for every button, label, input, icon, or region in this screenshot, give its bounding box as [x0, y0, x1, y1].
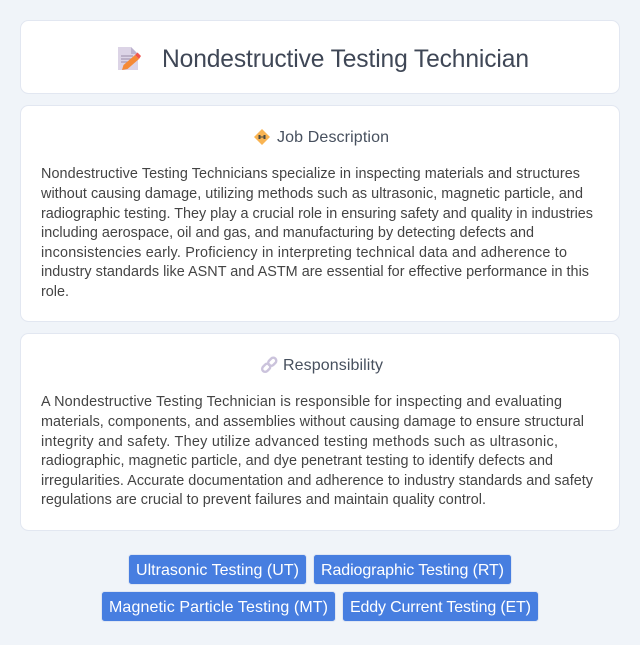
responsibility text: integrity and safety. They utilize advanced testing methods such as ultrasonic,: [41, 434, 558, 450]
responsibility text: materials, components, and assemblies without causing damage to ensure structural: [41, 414, 584, 430]
tag: radiographic testing: Radiographic Testing (RT): [321, 562, 504, 579]
responsibility text: radiographic, magnetic particle, and dye penetrant testing to identify defects and: [41, 453, 553, 469]
job description text: [40, 166, 593, 300]
responsibility text: [41, 394, 594, 508]
panel: responsibility: [20, 334, 620, 530]
tag: magnetic particle testing: Magnetic Particle Testing (MT): [109, 599, 328, 616]
job description text: without causing damage, utilizing methods such as ultrasonic, magnetic particle, and: [40, 186, 583, 202]
job description text: role.: [41, 284, 69, 300]
job description text: radiographic testing. They play a crucial role in ensuring safety and quality in industries: [41, 206, 593, 222]
tag: magnetic particle testing: [102, 592, 336, 622]
tag: ultrasonic testing: Ultrasonic Testing (UT): [136, 562, 299, 579]
icon: link: [261, 356, 278, 373]
tag: radiographic testing: [314, 554, 512, 584]
job description text: industry standards like ASNT and ASTM are essential for effective performance in this: [41, 264, 589, 280]
responsibility text: A Nondestructive Testing Technician is responsible for inspecting and evaluating: [41, 394, 562, 410]
job description text: including aerospace, oil and gas, and manufacturing by detecting defects and: [41, 225, 534, 241]
job description text: inconsistencies early. Proficiency in interpreting technical data and adherence to: [41, 245, 567, 261]
heading: job description: Job Description: [277, 129, 389, 146]
responsibility text: regulations are crucial to prevent failures and maintain quality control.: [41, 492, 486, 508]
tag: eddy current testing: [342, 592, 538, 622]
job description text: Nondestructive Testing Technicians specialize in inspecting materials and structures: [41, 166, 580, 182]
panel: title: [20, 20, 620, 94]
icon: diamond sign: [254, 129, 270, 145]
icon: document with pencil: [118, 47, 141, 70]
title text: Nondestructive Testing Technician: [162, 46, 529, 73]
responsibility text: irregularities. Accurate documentation and adherence to industry standards and safety: [41, 473, 594, 489]
heading: responsibility: Responsibility: [283, 357, 383, 374]
panel: job description: [20, 106, 620, 322]
tag: eddy current testing: Eddy Current Testing (ET): [350, 599, 531, 616]
tag: ultrasonic testing: [128, 554, 306, 584]
